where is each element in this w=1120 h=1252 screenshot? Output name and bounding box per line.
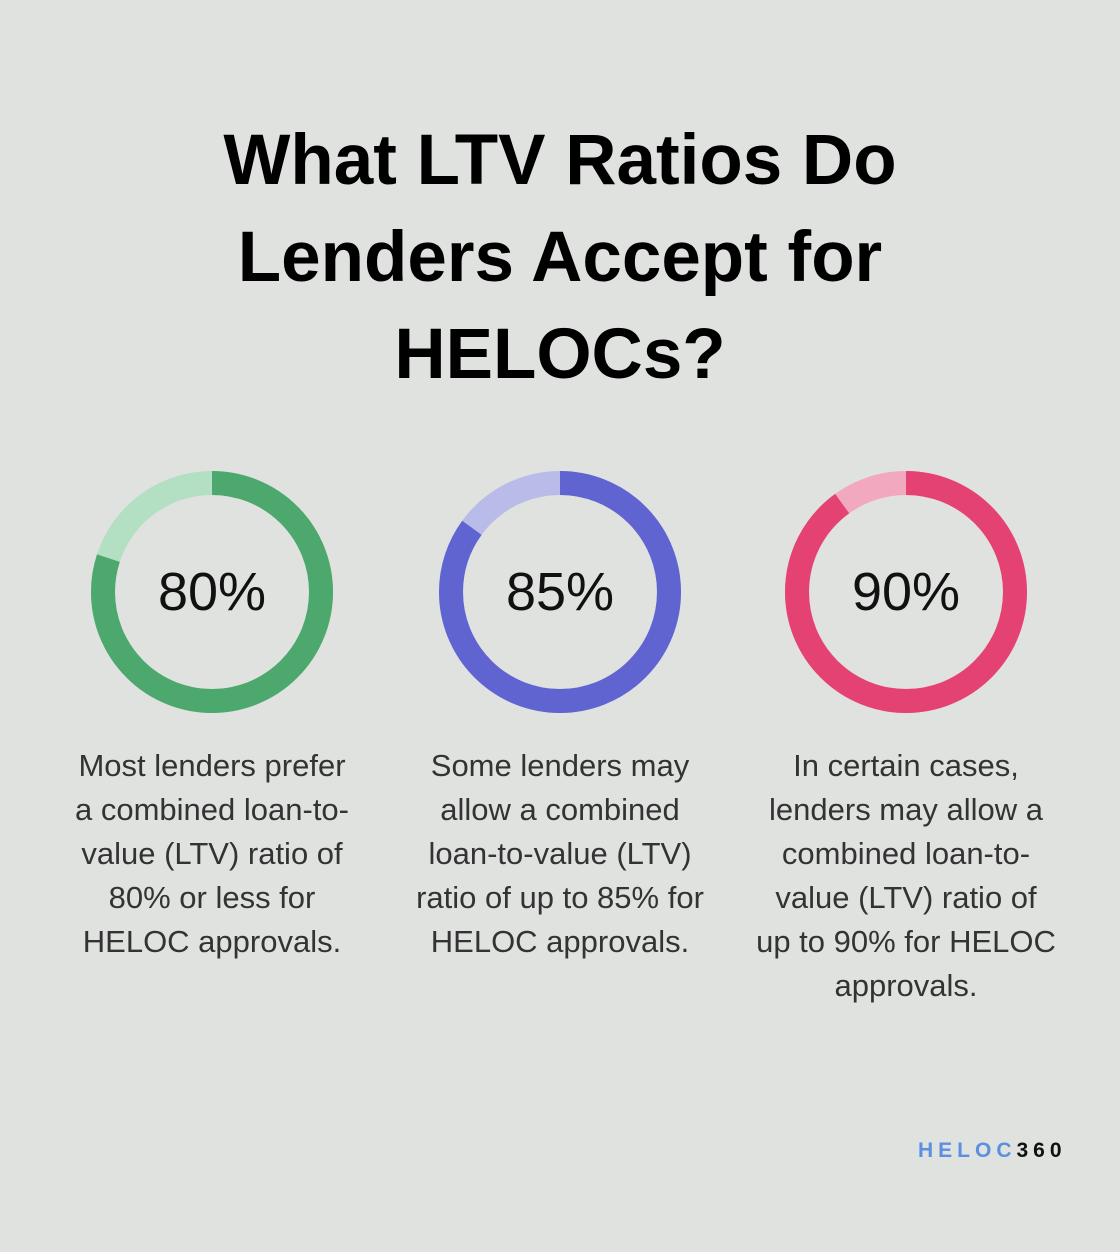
title: HELOCs? <box>394 315 726 394</box>
text: 85% description: HELOC approvals. <box>431 924 689 959</box>
text: 90% description <box>756 748 1056 1003</box>
text: 90% description: lenders may allow a <box>769 792 1043 827</box>
title <box>223 121 897 394</box>
donut: 90% <box>785 471 1027 713</box>
text: 85% description: ratio of up to 85% for <box>416 880 704 915</box>
title: Lenders Accept for <box>238 218 882 297</box>
text: 90% description: In certain cases, <box>793 748 1019 783</box>
donut: 85%: 85% <box>506 562 614 622</box>
donut: 90%: 90% <box>852 562 960 622</box>
text: 80% description: HELOC approvals. <box>83 924 341 959</box>
text: 80% description: value (LTV) ratio of <box>81 836 343 871</box>
text: 90% description: combined loan-to- <box>782 836 1030 871</box>
donut: 85% <box>439 471 681 713</box>
title: What LTV Ratios Do <box>223 121 897 200</box>
donut: 80% <box>91 471 333 713</box>
text: 90% description: up to 90% for HELOC <box>756 924 1056 959</box>
donut: 80%: 80% <box>158 562 266 622</box>
text: 80% description: a combined loan-to- <box>75 792 349 827</box>
text: 80% description: Most lenders prefer <box>78 748 346 783</box>
text: 85% description <box>416 748 704 959</box>
text: 90% description: approvals. <box>834 968 978 1003</box>
text: 90% description: value (LTV) ratio of <box>775 880 1037 915</box>
text: 80% description: 80% or less for <box>109 880 315 915</box>
text: 85% description: Some lenders may <box>431 748 689 783</box>
text: 85% description: allow a combined <box>440 792 680 827</box>
text: 80% description <box>75 748 349 959</box>
text: 85% description: loan-to-value (LTV) <box>428 836 692 871</box>
logo: HELOC360 <box>918 1139 1067 1162</box>
